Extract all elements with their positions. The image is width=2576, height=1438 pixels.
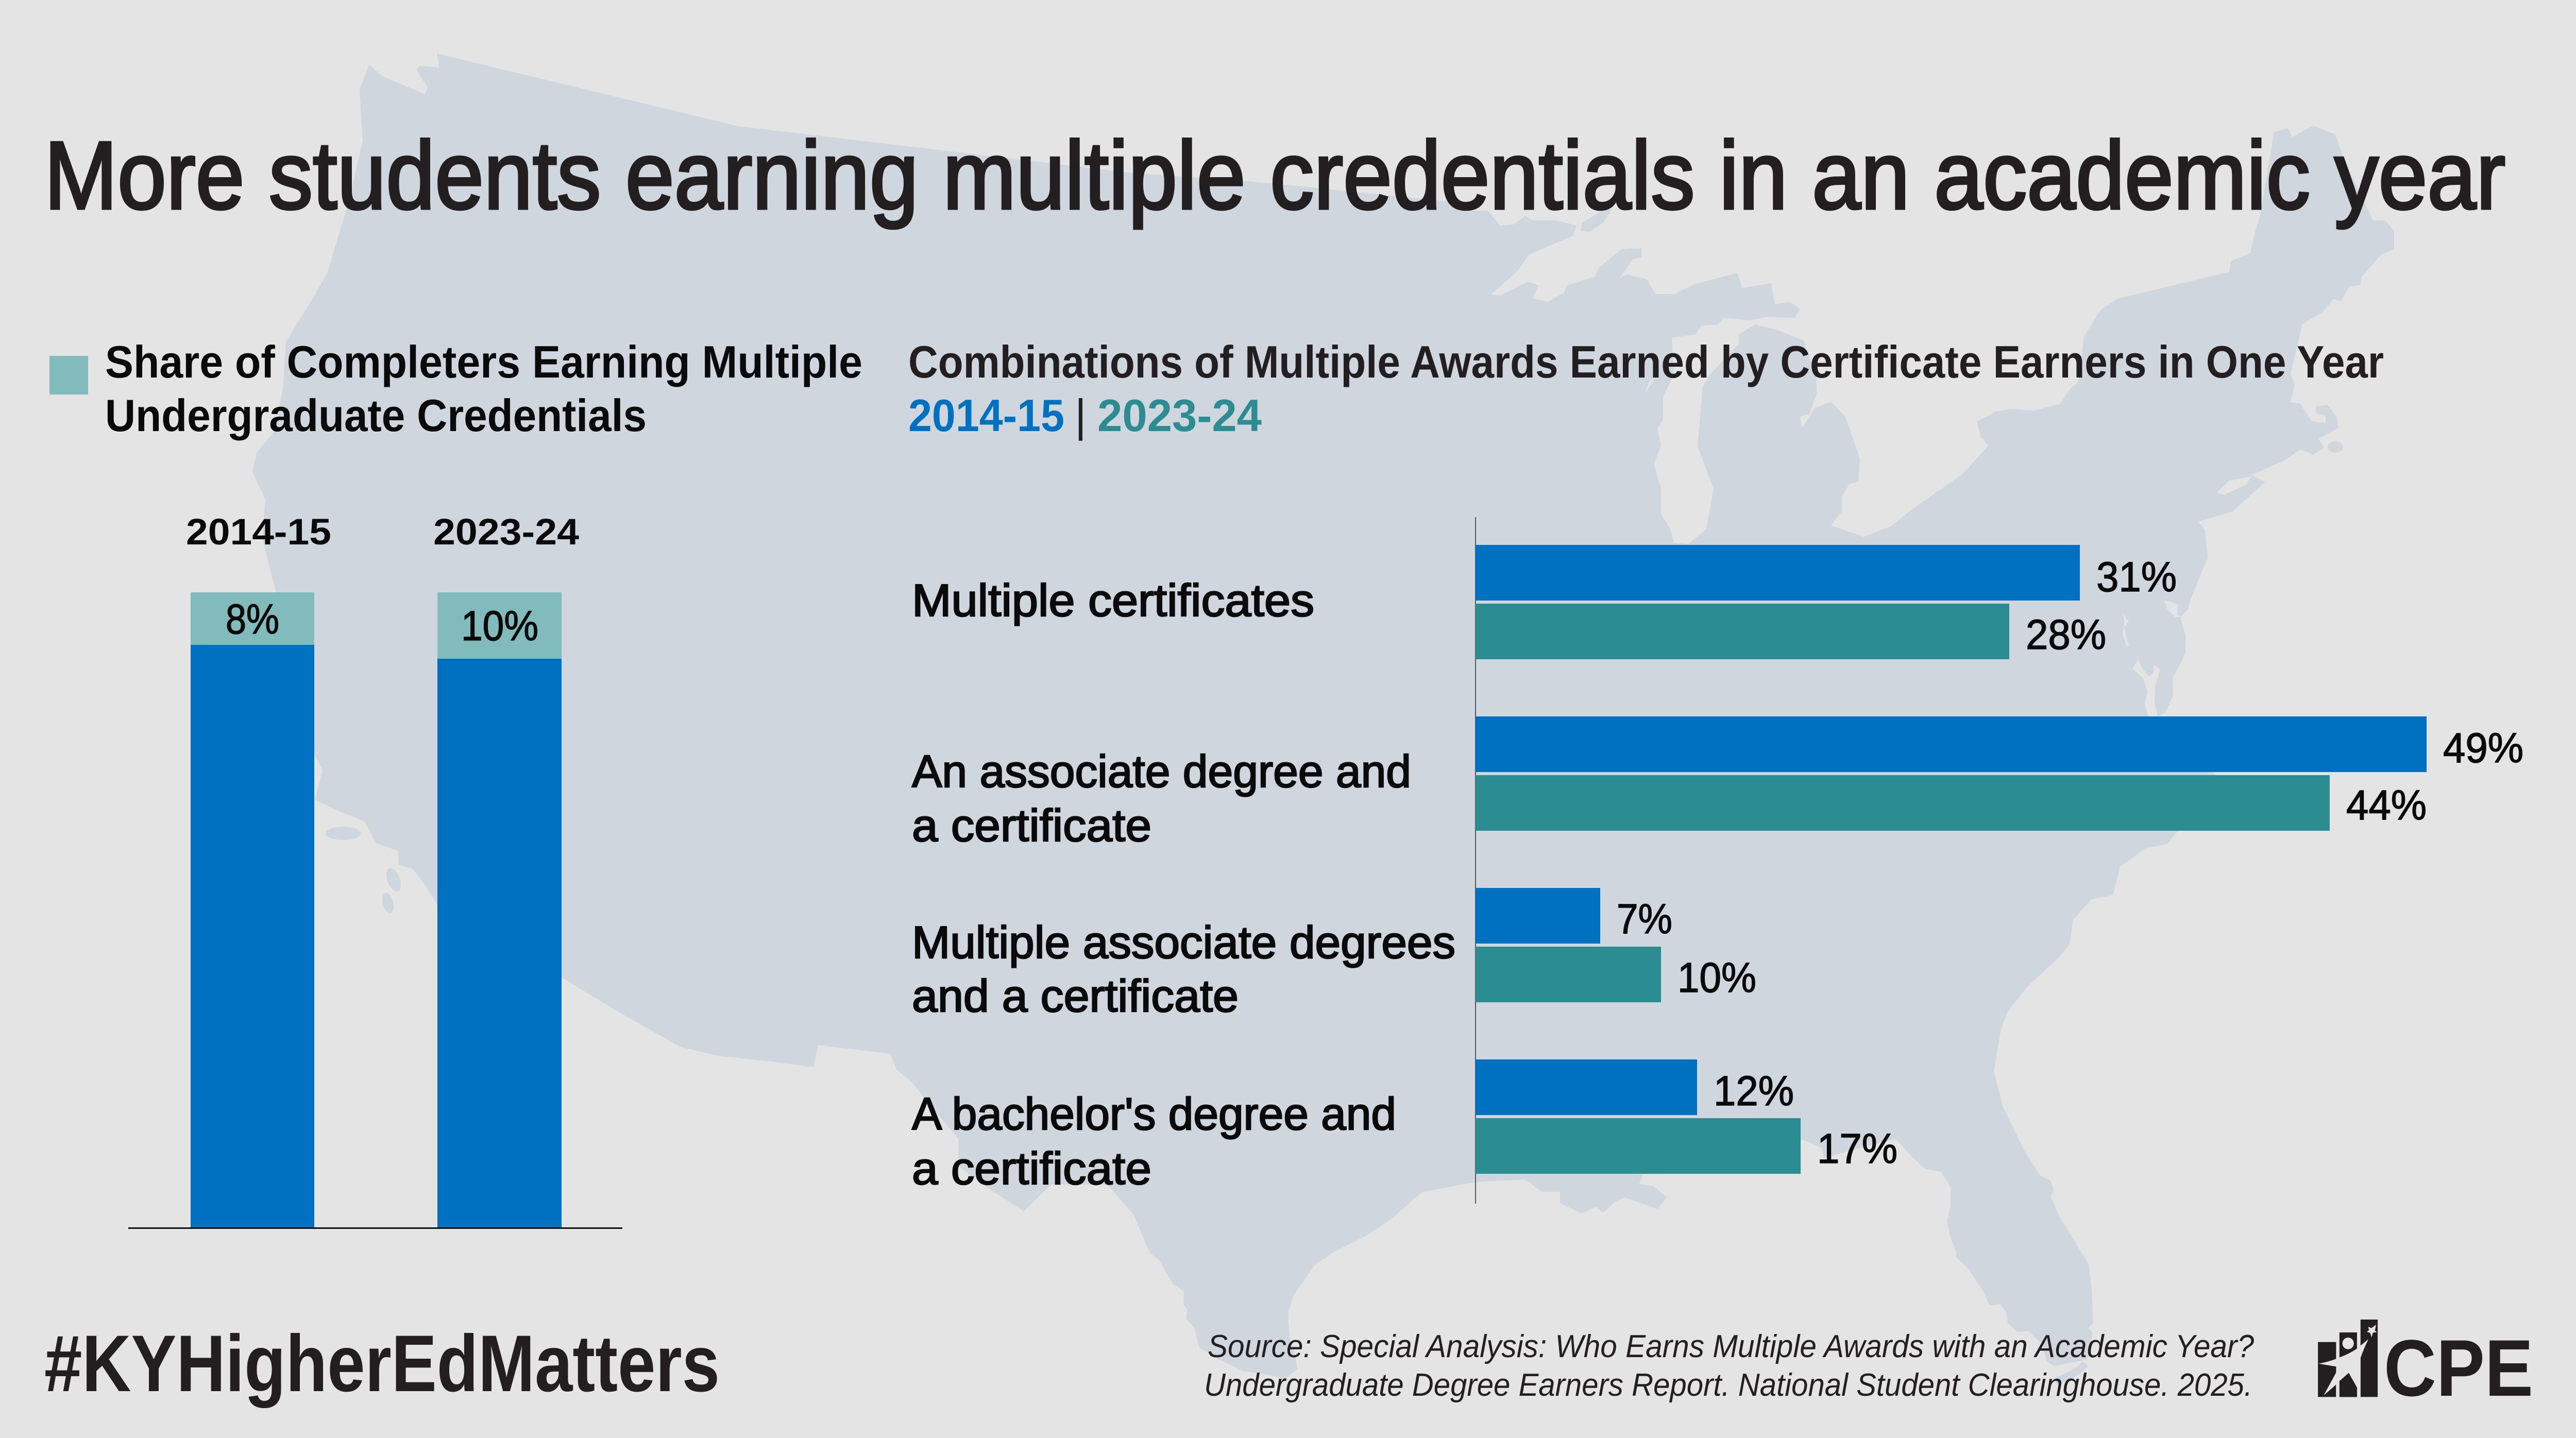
row: associate degree and certificate — [912, 716, 2523, 851]
bar 2023-24: 10% — [461, 603, 538, 649]
row: multiple associate degrees and certificate: 7% — [1617, 896, 1672, 943]
row: multiple certificates: Multiple certificates — [912, 575, 1314, 626]
row: associate degree and certificate: 44% — [2346, 782, 2427, 829]
heading: combinations of multiple awards: Combinations of Multiple Awards Earned by Certificate Earners in One Year — [908, 336, 2384, 387]
row: bachelor's degree and certificate — [912, 1059, 1897, 1194]
legend: share of completers: Share of Completers Earning Multiple — [105, 336, 862, 387]
row: associate degree and certificate: a certificate — [912, 800, 1151, 851]
heading: combinations of multiple awards: | — [1075, 390, 1087, 441]
bar 2014-15 — [186, 512, 331, 1228]
row: bachelor's degree and certificate: A bachelor's degree and — [912, 1088, 1396, 1139]
source note: Undergraduate Degree Earners Report. National Student Clearinghouse. 2025. — [1204, 1367, 2252, 1403]
row: multiple associate degrees and certificate: Multiple associate degrees — [912, 917, 1455, 968]
heading: combinations of multiple awards — [908, 336, 2384, 441]
source note — [1204, 1329, 2254, 1403]
row: multiple associate degrees and certificate — [912, 888, 1756, 1021]
row: associate degree and certificate: 49% — [2443, 725, 2523, 772]
source note: Source: Special Analysis: Who Earns Multiple Awards with an Academic Year? — [1208, 1329, 2254, 1364]
heading: combinations of multiple awards: 2023-24 — [1097, 390, 1262, 441]
row: bachelor's degree and certificate: 12% — [1714, 1068, 1794, 1115]
row: multiple certificates: 31% — [2096, 554, 2177, 601]
bar 2014-15: 8% — [226, 596, 279, 643]
row: bachelor's degree and certificate: 17% — [1817, 1125, 1897, 1172]
stacked bar chart: share of completers — [128, 512, 622, 1229]
row: associate degree and certificate: An associate degree and — [912, 746, 1411, 797]
bar 2023-24 — [433, 512, 580, 1228]
CPE logo: CPE — [2384, 1324, 2533, 1413]
hashtag: #KYHigherEdMatters — [44, 1319, 720, 1409]
row: multiple associate degrees and certificate: 10% — [1677, 954, 1756, 1001]
background map of the United States — [252, 54, 2394, 1381]
legend: share of completers — [49, 336, 862, 441]
row: multiple certificates — [912, 545, 2177, 659]
row: bachelor's degree and certificate: a certificate — [912, 1143, 1151, 1194]
bar 2014-15: 2014-15 — [186, 512, 331, 553]
CPE logo — [2318, 1320, 2533, 1413]
row: multiple certificates: 28% — [2026, 611, 2106, 658]
logo icon: bars with star figure — [2318, 1320, 2378, 1397]
horizontal bar chart: combinations of awards — [912, 517, 2523, 1204]
heading: combinations of multiple awards: 2014-15 — [908, 390, 1064, 441]
row: multiple associate degrees and certificate: and a certificate — [912, 970, 1239, 1021]
legend: share of completers: Undergraduate Credentials — [105, 390, 647, 441]
bar 2023-24: 2023-24 — [433, 512, 580, 553]
